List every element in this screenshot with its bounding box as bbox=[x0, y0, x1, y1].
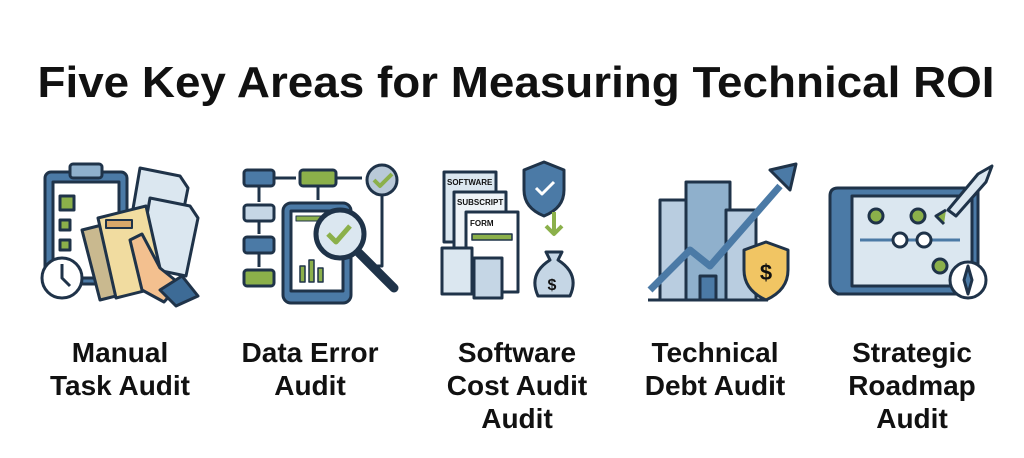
icon: software cost audit: $ bbox=[548, 277, 557, 294]
icon: software cost audit: SOFTWARE bbox=[447, 178, 493, 187]
label: software cost audit bbox=[447, 337, 587, 434]
label: software cost audit: Software bbox=[458, 337, 576, 368]
label: software cost audit: Cost Audit bbox=[447, 370, 587, 401]
label: software cost audit: Audit bbox=[481, 403, 553, 434]
icon: manual task audit bbox=[42, 164, 198, 306]
title: Five Key Areas for Measuring Technical ROI bbox=[38, 58, 994, 107]
icon: software cost audit: SUBSCRIPT bbox=[457, 198, 503, 207]
icon: software cost audit: FORM bbox=[470, 219, 494, 228]
icon: strategic roadmap audit bbox=[830, 166, 992, 298]
icon: software cost audit bbox=[442, 162, 573, 298]
label: data error audit: Audit bbox=[274, 370, 346, 401]
label: manual task audit: Manual bbox=[72, 337, 168, 368]
label: strategic roadmap audit: Roadmap bbox=[848, 370, 976, 401]
label: data error audit bbox=[242, 337, 379, 401]
icon: data error audit bbox=[244, 165, 397, 303]
label: strategic roadmap audit bbox=[848, 337, 976, 434]
label: manual task audit: Task Audit bbox=[50, 370, 190, 401]
label: data error audit: Data Error bbox=[242, 337, 379, 368]
icon: technical debt audit: $ bbox=[760, 260, 772, 285]
icon: technical debt audit bbox=[648, 164, 796, 300]
label: strategic roadmap audit: Audit bbox=[876, 403, 948, 434]
label: manual task audit bbox=[50, 337, 190, 401]
label: technical debt audit bbox=[645, 337, 785, 401]
label: strategic roadmap audit: Strategic bbox=[852, 337, 972, 368]
label: technical debt audit: Debt Audit bbox=[645, 370, 785, 401]
label: technical debt audit: Technical bbox=[651, 337, 779, 368]
